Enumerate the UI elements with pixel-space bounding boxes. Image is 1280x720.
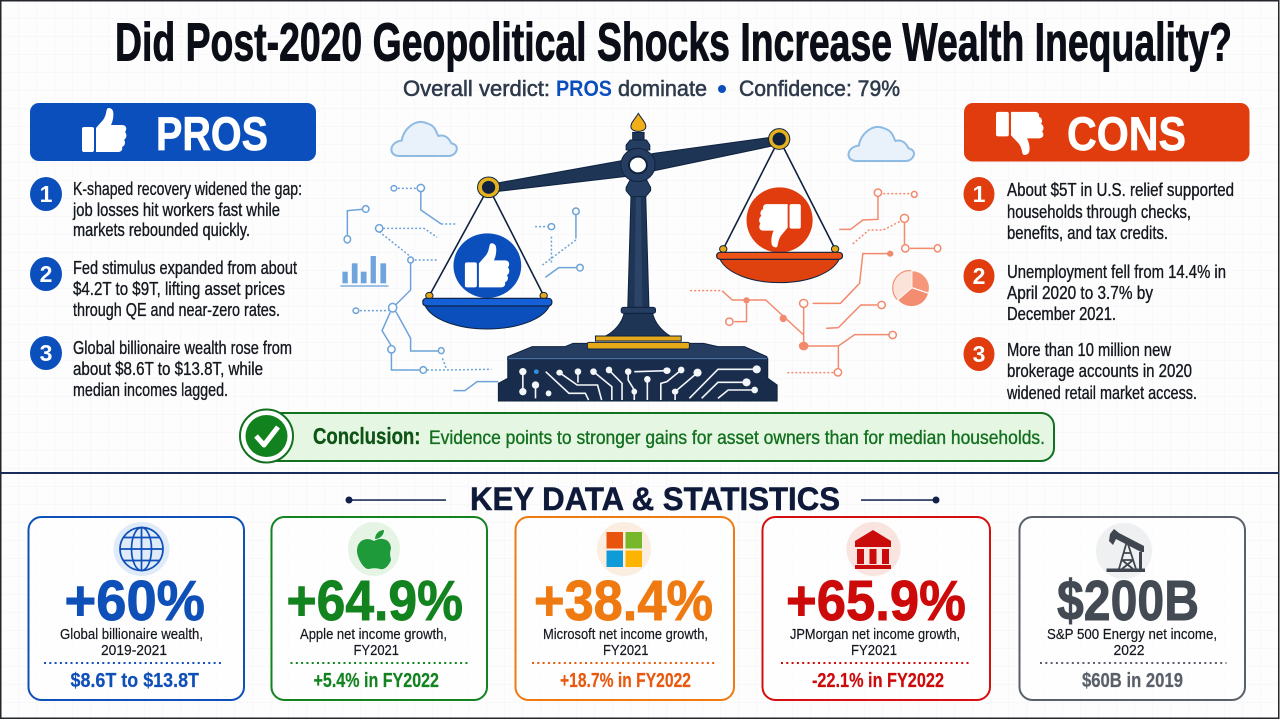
scale column: [606, 132, 670, 336]
central illustration: balance scale: [340, 113, 941, 401]
comparison: +5.4% in FY2022: [314, 670, 439, 692]
icon: thumbs down: [996, 112, 1044, 155]
pro item 3: about $8.6T to $13.8T, while: [73, 359, 263, 379]
icon: left cloud: [391, 122, 457, 156]
panel: cons: [964, 103, 1250, 403]
left hanging pan: [423, 187, 552, 329]
scale beam: [496, 137, 772, 192]
description: [60, 626, 203, 659]
panel: pros: [30, 103, 316, 400]
comparison: $8.6T to $13.8T: [70, 670, 199, 692]
con item 1: About $5T in U.S. relief supported: [1007, 180, 1234, 200]
comparison: -22.1% in FY2022: [812, 670, 944, 692]
con item 2: 2: [973, 263, 985, 289]
icon: blue bar chart: [340, 256, 389, 287]
right hanging pan: [717, 139, 842, 283]
section divider: [1, 472, 1279, 474]
con item 2: [964, 259, 1226, 324]
description: 2022: [1114, 642, 1144, 659]
con item 3: [964, 337, 1197, 403]
cons heading: CONS: [1067, 107, 1186, 160]
verdict subtitle: Overall verdict:: [403, 76, 550, 101]
pro item 1: K-shaped recovery widened the gap:: [73, 179, 302, 199]
cons circle with thumbs down: [747, 187, 813, 253]
cons banner: [964, 103, 1250, 162]
con item 3: brokerage accounts in 2020: [1007, 361, 1192, 381]
description: JPMorgan net income growth,: [790, 626, 960, 643]
description: S&P 500 Energy net income,: [1047, 626, 1217, 643]
description: [543, 626, 708, 659]
con item 1: [964, 177, 1234, 243]
pro item 1: job losses hit workers fast while: [72, 200, 280, 220]
verdict subtitle: dominate: [618, 76, 707, 101]
conclusion banner: [240, 410, 1054, 462]
beam end pivots: [478, 129, 790, 198]
icon: thumbs up: [82, 108, 126, 152]
value: +65.9%: [786, 569, 966, 633]
value: +64.9%: [286, 569, 463, 633]
con item 2: April 2020 to 3.7% by: [1007, 283, 1153, 303]
con item 3: 3: [973, 341, 985, 367]
icon: globe: [114, 522, 170, 576]
stat card: energy: [1020, 517, 1245, 700]
pro item 2: 2: [40, 261, 52, 287]
center pivot ring: [621, 148, 655, 182]
pro item 1: [30, 177, 302, 240]
stat card: apple: [272, 517, 487, 700]
description: FY2021: [603, 642, 648, 659]
description: FY2021: [851, 642, 897, 659]
conclusion text: Evidence points to stronger gains for asset owners than for median households.: [429, 428, 1045, 449]
finial: [631, 113, 646, 131]
stat card: billionaire wealth: [28, 517, 244, 700]
verdict subtitle: PROS: [556, 76, 612, 101]
description: FY2021: [354, 642, 399, 659]
icon: check badge: [240, 410, 293, 462]
pro item 3: median incomes lagged.: [73, 380, 228, 400]
pros circle with thumbs up: [453, 233, 521, 298]
pros heading: PROS: [156, 107, 268, 160]
pro item 1: 1: [40, 181, 53, 207]
icon: microsoft squares: [597, 522, 651, 576]
pros banner: [30, 103, 316, 161]
con item 1: 1: [973, 181, 986, 207]
description: [1047, 626, 1217, 659]
stat card: jpmorgan: [762, 517, 990, 700]
pro item 2: through QE and near-zero rates.: [73, 300, 280, 320]
con item 2: Unemployment fell from 14.4% in: [1007, 262, 1226, 282]
description: Global billionaire wealth,: [60, 626, 203, 643]
con item 3: More than 10 million new: [1007, 340, 1172, 360]
icon: red pie chart: [893, 271, 929, 307]
blue circuit lines: [344, 184, 583, 391]
con item 2: December 2021.: [1007, 304, 1116, 324]
circuit traces on base: [519, 365, 761, 400]
value: +38.4%: [534, 569, 713, 633]
description: [300, 626, 447, 659]
verdict subtitle: Confidence: 79%: [739, 76, 900, 101]
icon: bank: [846, 522, 900, 576]
stat card: microsoft: [516, 517, 734, 700]
scale base: [498, 343, 777, 401]
pro item 2: $4.2T to $9T, lifting asset prices: [73, 279, 285, 299]
pro item 3: 3: [40, 340, 52, 366]
value: +60%: [64, 569, 205, 633]
red circuit lines: [690, 189, 941, 376]
description: [790, 626, 960, 659]
pro item 1: markets rebounded quickly.: [73, 220, 250, 240]
con item 1: households through checks,: [1007, 202, 1191, 222]
statistics heading: [346, 481, 940, 517]
icon: right cloud: [849, 127, 914, 161]
icon: apple: [348, 522, 400, 576]
gold base plates: [587, 336, 689, 349]
con item 3: widened retail market access.: [1006, 383, 1197, 403]
icon: oil pump: [1096, 523, 1152, 579]
statistics heading: KEY DATA & STATISTICS: [470, 481, 840, 517]
verdict subtitle: [403, 76, 900, 101]
pro item 2: [30, 257, 297, 320]
description: 2019-2021: [101, 642, 167, 659]
pro item 3: [30, 336, 292, 400]
description: Microsoft net income growth,: [543, 626, 708, 643]
con item 1: benefits, and tax credits.: [1007, 223, 1168, 243]
comparison: +18.7% in FY2022: [560, 670, 691, 692]
conclusion label: Conclusion:: [313, 423, 420, 449]
pro item 2: Fed stimulus expanded from about: [73, 258, 297, 278]
description: Apple net income growth,: [300, 626, 447, 643]
comparison: $60B in 2019: [1082, 670, 1183, 692]
pro item 3: Global billionaire wealth rose from: [73, 338, 292, 358]
value: $200B: [1057, 569, 1199, 633]
